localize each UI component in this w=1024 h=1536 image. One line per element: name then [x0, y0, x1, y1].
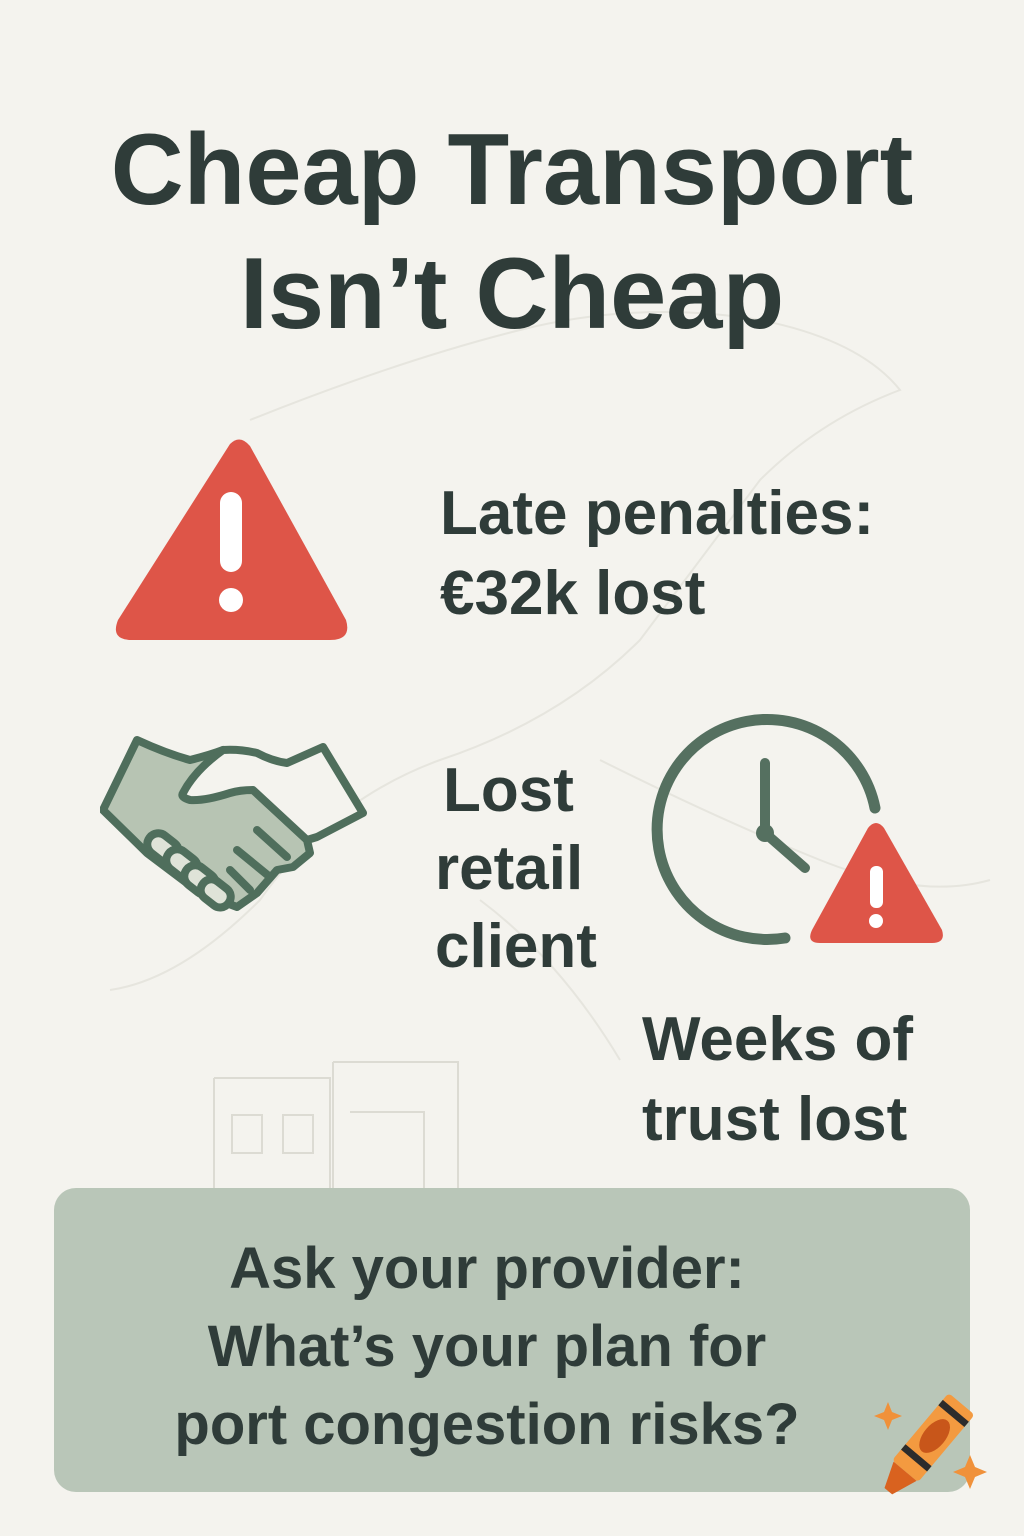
callout text: port congestion risks? [174, 1392, 800, 1457]
text: weeks of trust lost: trust lost [642, 1085, 907, 1154]
text: weeks of trust lost [642, 1005, 914, 1154]
icon: warning triangle [116, 440, 348, 640]
title: Isn’t Cheap [240, 238, 784, 350]
callout box [54, 1188, 970, 1492]
icon: handshake [100, 736, 367, 912]
text: late penalties: Late penalties: [440, 479, 874, 548]
text: lost retail client: Lost [443, 756, 574, 825]
callout text: Ask your provider: [229, 1236, 745, 1301]
text: lost retail client: client [435, 912, 597, 981]
callout text [174, 1236, 800, 1457]
text: weeks of trust lost: Weeks of [642, 1005, 913, 1074]
title [111, 114, 913, 350]
text: late penalties [440, 479, 874, 628]
title: Cheap Transport [111, 114, 913, 226]
text: lost retail client: retail [435, 834, 583, 903]
icon: crayon [874, 1394, 987, 1494]
icon: clock with warning [652, 714, 943, 945]
text: late penalties: €32k lost [440, 559, 705, 628]
callout text: What’s your plan for [208, 1314, 766, 1379]
text: lost retail client [435, 756, 597, 981]
